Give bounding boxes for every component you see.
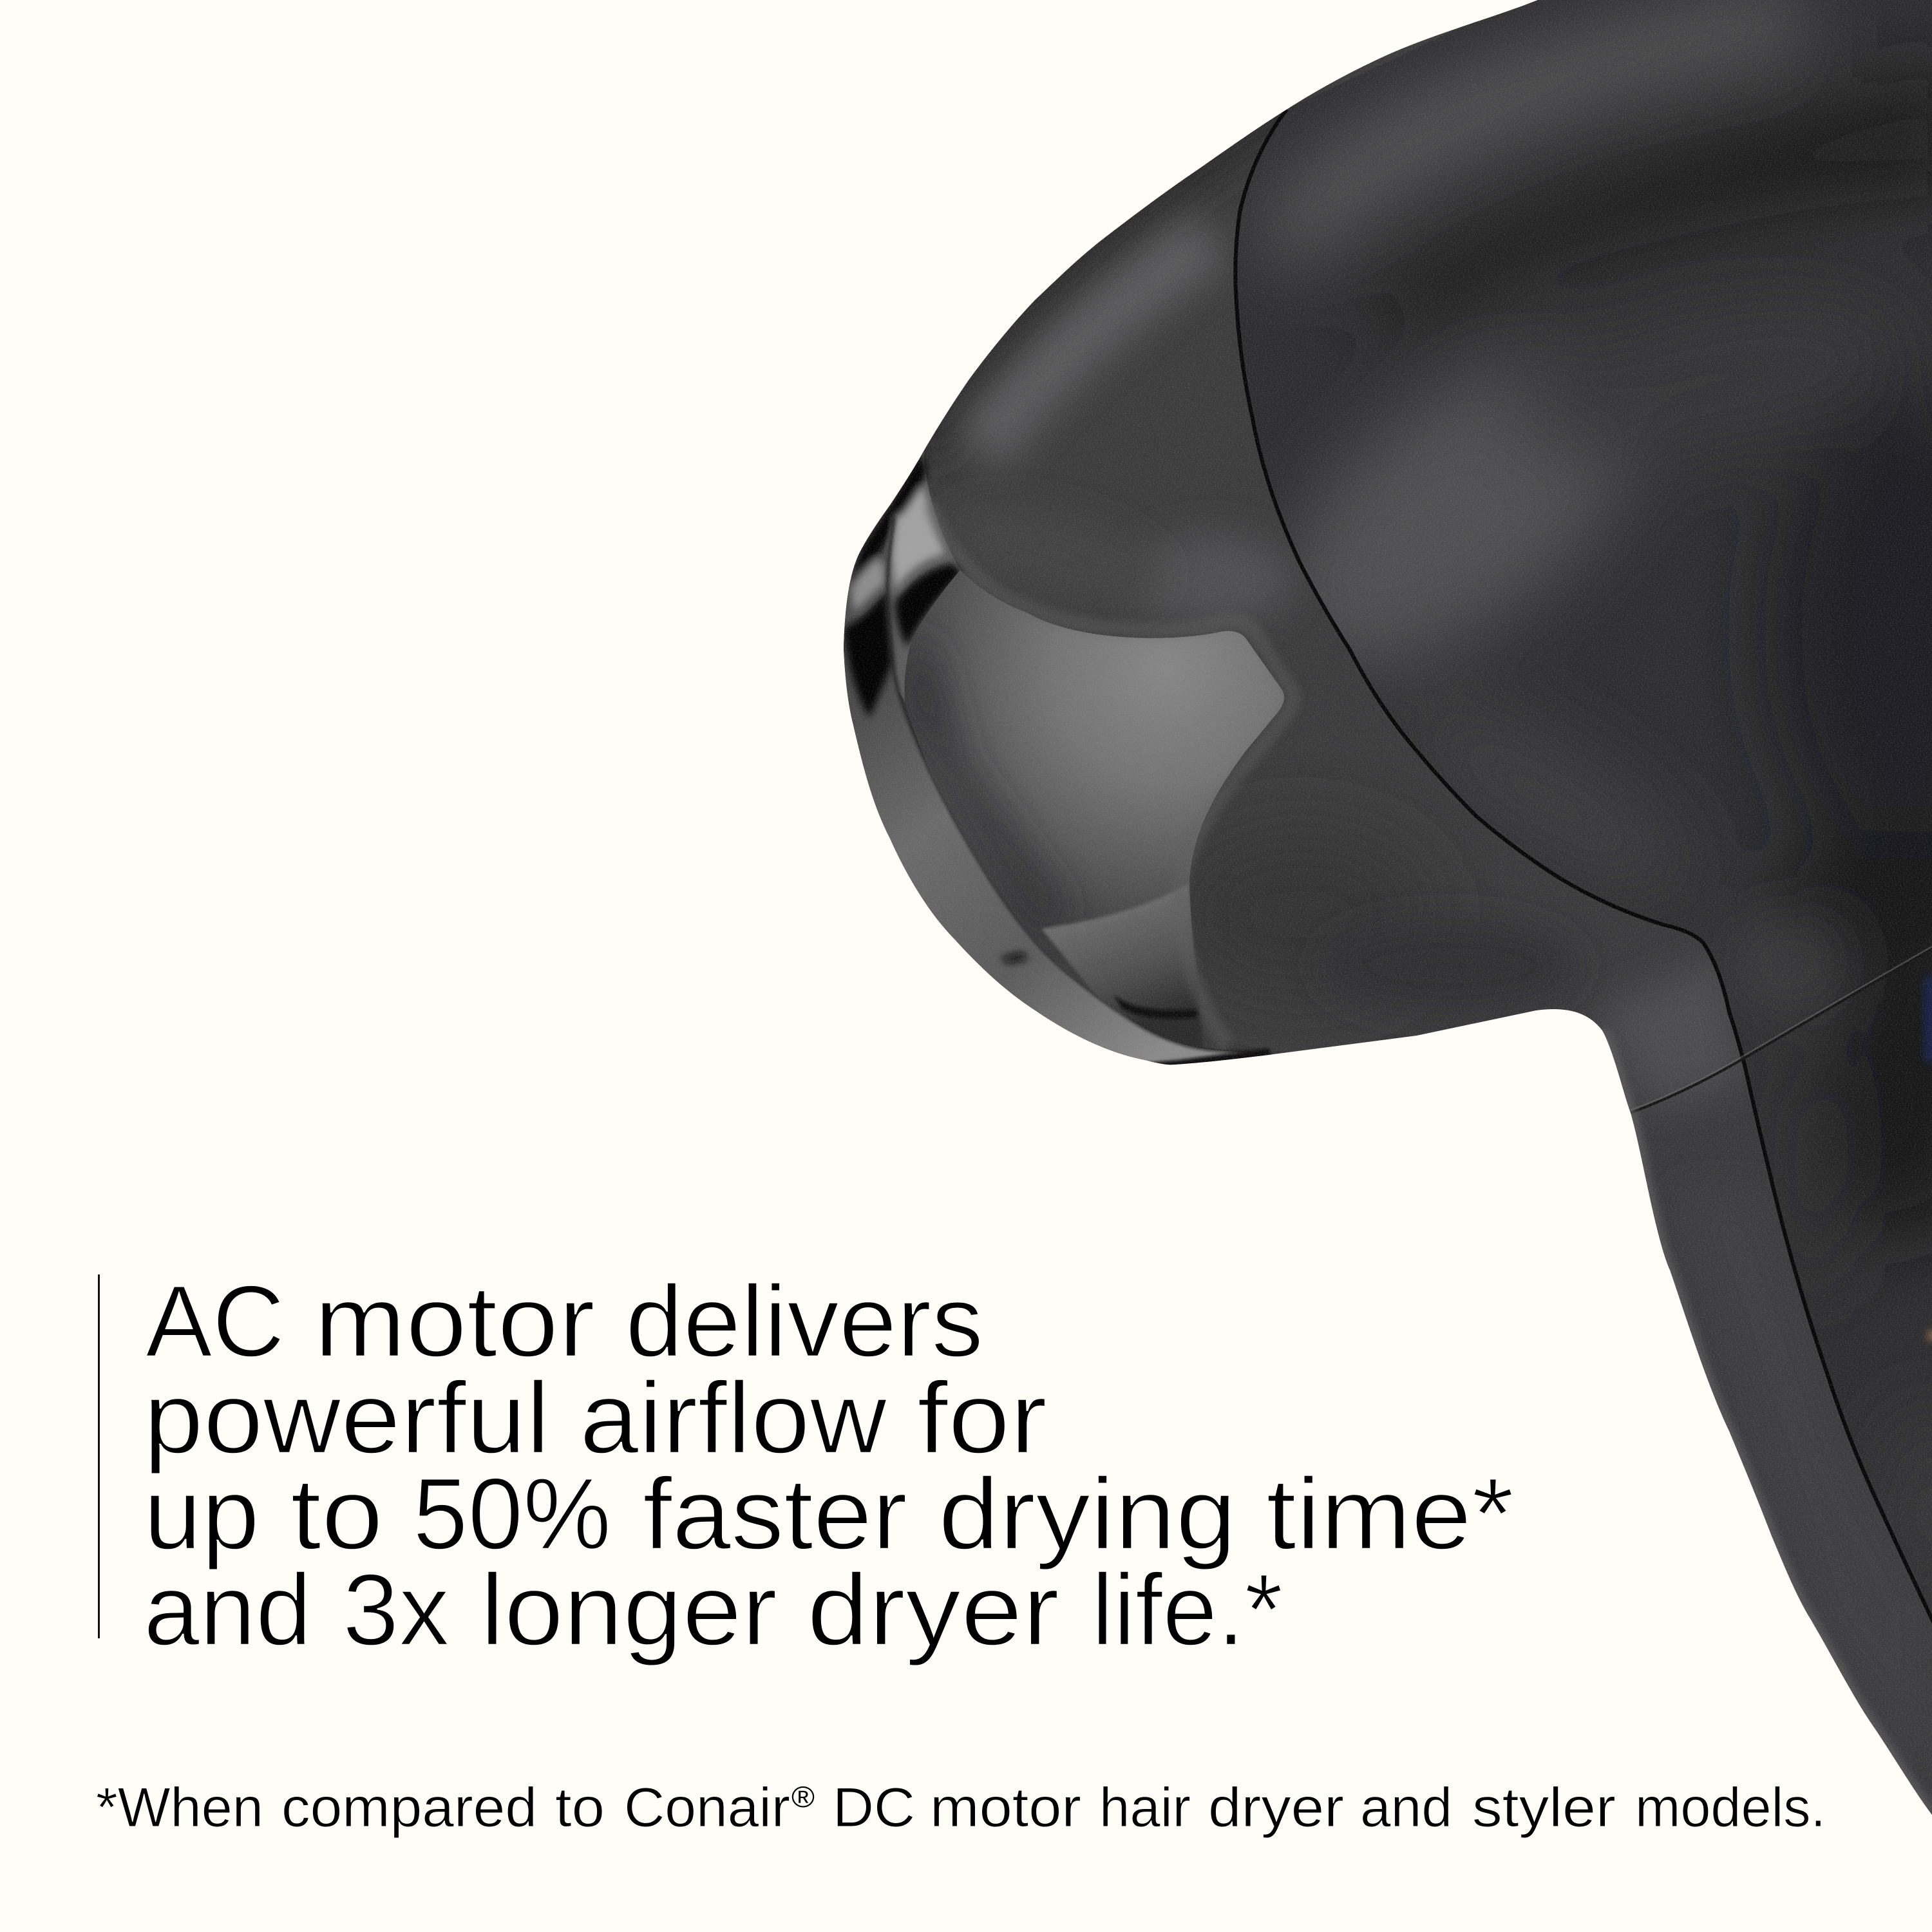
line 3: drying [938,1457,1236,1571]
line 4: longer [480,1553,777,1667]
line 4 [144,1553,1283,1667]
line 2 [144,1361,1047,1475]
body seam [1235,109,1932,1626]
glossy lower reflection [1041,884,1204,1056]
hair dryer product image [805,0,1932,1868]
footnote: motor [930,1777,1081,1839]
footnote: dryer [1208,1777,1344,1839]
dryer base shell [805,0,1932,1861]
surface grain [805,0,1932,1868]
footnote: models. [1635,1777,1826,1839]
footnote: *When [96,1777,263,1839]
line 1: AC [146,1265,285,1378]
handle joint line [1631,943,1932,1113]
nozzle shell shading [921,97,1578,1011]
line 3: to [290,1457,383,1571]
front bottom dark edge [1133,1048,1275,1075]
light gloss reflections [851,559,885,612]
window bevel edge [931,504,1293,1046]
line 1: delivers [625,1265,983,1378]
inner gloss band [887,448,960,702]
line 4: and [144,1553,312,1667]
black gloss reflections [844,589,892,718]
footnote: hair [1099,1777,1191,1839]
line 3 [144,1457,1514,1571]
line 4: life.* [1092,1553,1283,1667]
footnote: Conair [624,1777,790,1839]
footnote [96,1777,1826,1839]
blue reflection [1924,976,1932,1063]
line 2: for [917,1361,1047,1475]
line 2: powerful [144,1361,550,1475]
line 3: up [144,1457,260,1571]
footnote: styler [1472,1777,1616,1839]
outer gloss band [805,444,1272,1095]
line 1: motor [314,1265,595,1378]
line 3: time* [1266,1457,1514,1571]
footnote: compared [281,1777,537,1839]
line 4: dryer [807,1553,1059,1667]
line 3: 50% [413,1457,611,1571]
footnote: ® [791,1780,815,1814]
air outlet window [889,554,1301,1056]
glossy front ring [805,444,1272,1095]
footnote: to [555,1777,605,1839]
silhouette edge softening [1602,1030,1932,1815]
motor body and handle shading right of seam [1222,0,1932,1636]
line 2: airflow [580,1361,887,1475]
lower-left window shade [902,631,1069,934]
handle shading left of seam [1597,953,1932,1790]
footnote: and [1360,1777,1452,1839]
ring divider line [887,517,1249,1053]
orange reflection [1928,1332,1932,1340]
headline text [144,1265,1514,1667]
line 3: faster [643,1457,907,1571]
line 1 [146,1265,983,1378]
accent rule [98,1274,100,1638]
dark reflection streak [1114,995,1198,1019]
line 4: 3x [343,1553,450,1667]
footnote: DC [833,1777,915,1839]
